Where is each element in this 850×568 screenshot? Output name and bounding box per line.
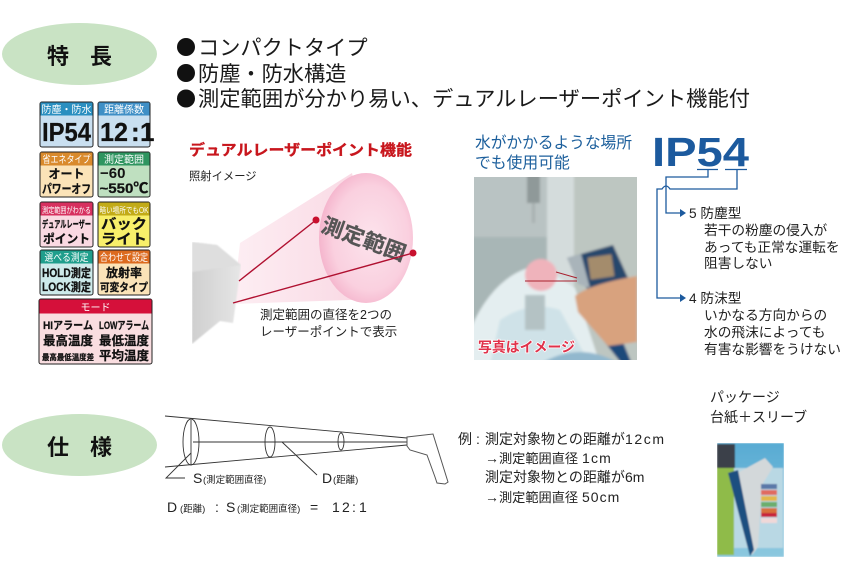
heading: water use [475,134,632,172]
thermometer outline [407,434,448,484]
formula: S [226,499,235,515]
badge: hold lock: 選べる測定 [44,251,88,264]
badge: backlight: バック [101,216,147,232]
distance to spot diagram [165,416,448,515]
formula: D [167,499,177,515]
dual laser point diagram [189,141,416,344]
formula: (距離) [180,503,205,515]
feature list: 測定範囲が分かり易い、デュアルレーザーポイント機能付 [198,87,750,111]
heading: features: 特 [47,44,69,69]
badge: mode: LOWアラーム [99,319,149,332]
badge: emissivity [98,250,150,295]
badge: IP54 [40,102,93,147]
spec badges [39,102,154,364]
label: D: (距離) [333,474,358,486]
heading: features [2,23,157,85]
text: dust protection: あっても正常な運転を [704,240,840,255]
cone lines [165,416,407,478]
badge: emissivity: 合わせて設定 [100,251,148,264]
example text: 測定対象物との距離が [485,431,625,447]
heading: dual laser: デュアルレーザーポイント機能 [189,141,412,159]
heading: water use: でも使用可能 [475,154,570,172]
badge: auto power off: パワーオフ [42,182,91,196]
feature list: 防塵・防水構造 [198,62,346,86]
text: dust protection: 5 防塵型 [689,206,742,221]
badge: auto power off: 省エネタイプ [42,153,90,166]
badge: measuring range: 測定範囲 [104,153,144,166]
badge: emissivity: 放射率 [106,265,142,280]
badge: backlight: 暗い場所でもOK [100,205,149,215]
connector arrows [657,170,747,298]
badge: auto power off [40,152,93,197]
example text [458,431,664,505]
example text: 測定対象物との距離が [485,469,625,485]
example text: 測定範囲直径 [499,490,578,505]
formula: : [215,499,219,515]
example text: → [485,450,499,466]
heading: specifications: 様 [90,435,112,460]
badge: measuring range [98,152,150,197]
heading: specifications [2,414,157,476]
badge: mode [39,299,152,364]
label: S: (測定範囲直径) [203,474,266,486]
example text: 1cm [582,450,612,466]
badge: IP54: 防塵・防水 [42,103,92,116]
badge: mode: 最高温度 [43,333,93,348]
illustration: device box [192,242,241,344]
package caption: 台紙＋スリーブ [710,409,807,425]
badge: measuring range: ~550℃ [100,180,148,196]
formula: 1 [359,499,367,515]
IP54 explanation [652,129,841,357]
package [710,389,807,557]
badge: mode: 最低温度 [99,333,149,348]
badge: distance ratio: 距離係数 [104,103,144,116]
badge: dual laser point: デュアルレーザー [42,218,91,231]
illustration: target sphere [319,173,413,303]
badge: distance ratio: : [131,117,140,147]
badge: dual laser point: ポイント [43,232,90,246]
text: dust protection [689,206,840,271]
example text: 50cm [582,489,620,505]
text: dust protection: 阻害しない [704,256,772,271]
badge: hold lock [40,250,93,295]
formula: 2 [342,499,350,515]
label: S: S [193,470,202,486]
badge: distance ratio: 1 [140,117,154,147]
heading: features: 長 [90,44,112,69]
label: measuring range: 測定範囲 [318,214,409,266]
text: splash protection: 4 防沫型 [689,291,742,306]
photo caption: 写真はイメージ [478,339,575,355]
example text: → [485,489,499,505]
badge: mode: 平均温度 [99,348,149,363]
text: splash protection: いかなる方向からの [704,308,827,323]
badge: mode: 最高最低温度差 [42,352,94,362]
caption: laser description: レーザーポイントで表示 [260,325,397,339]
badge: measuring range: −60 [100,165,125,182]
badge: backlight [98,202,150,247]
badge: distance ratio [98,102,154,147]
badge: dual laser point [40,202,93,247]
text: splash protection: 有害な影響をうけない [704,342,841,357]
package caption: パッケージ [710,389,780,405]
IP54 title: IP54 [652,129,749,175]
badge: mode: HIアラーム [43,319,93,332]
example text: : [476,431,480,447]
laser lines [233,216,416,303]
arrow heads [680,209,686,302]
text: splash protection [689,291,841,357]
water use photo [470,134,641,364]
heading: water use: 水がかかるような場所 [475,134,632,152]
feature list [177,37,750,111]
example text: 測定範囲直径 [499,451,578,466]
badge: dual laser point: 測定範囲がわかる [42,205,91,215]
badge: emissivity: 可変タイプ [100,280,148,294]
badge: mode: モード [80,303,110,314]
formula: 1 [332,499,340,515]
feature list: コンパクトタイプ [198,37,368,60]
formula: = [310,499,318,515]
example text: 6m [625,469,644,485]
caption: laser description [260,307,397,339]
text: splash protection: 水の飛沫によっても [704,325,825,340]
formula: : [352,499,356,515]
badge: hold lock: LOCK測定 [42,280,91,294]
badge: backlight: ライト [101,231,147,247]
formula: (測定範囲直径) [237,503,300,515]
badge: distance ratio: 12 [100,117,128,147]
label: D: D [322,470,332,486]
example text: 例 [458,431,472,447]
badge: auto power off: オート [48,167,85,181]
photo [470,173,641,364]
package photo [717,443,784,557]
badge: hold lock: HOLD測定 [42,266,91,280]
heading: specifications: 仕 [47,435,69,460]
illustration: beam cone [233,173,378,304]
example text: 12cm [625,431,664,447]
caption: laser description: 測定範囲の直径を2つの [260,307,392,322]
caption: irradiation image: 照射イメージ [189,169,257,183]
text: dust protection: 若干の粉塵の侵入が [704,222,828,238]
package caption [710,389,807,425]
badge: IP54: IP54 [42,117,91,147]
